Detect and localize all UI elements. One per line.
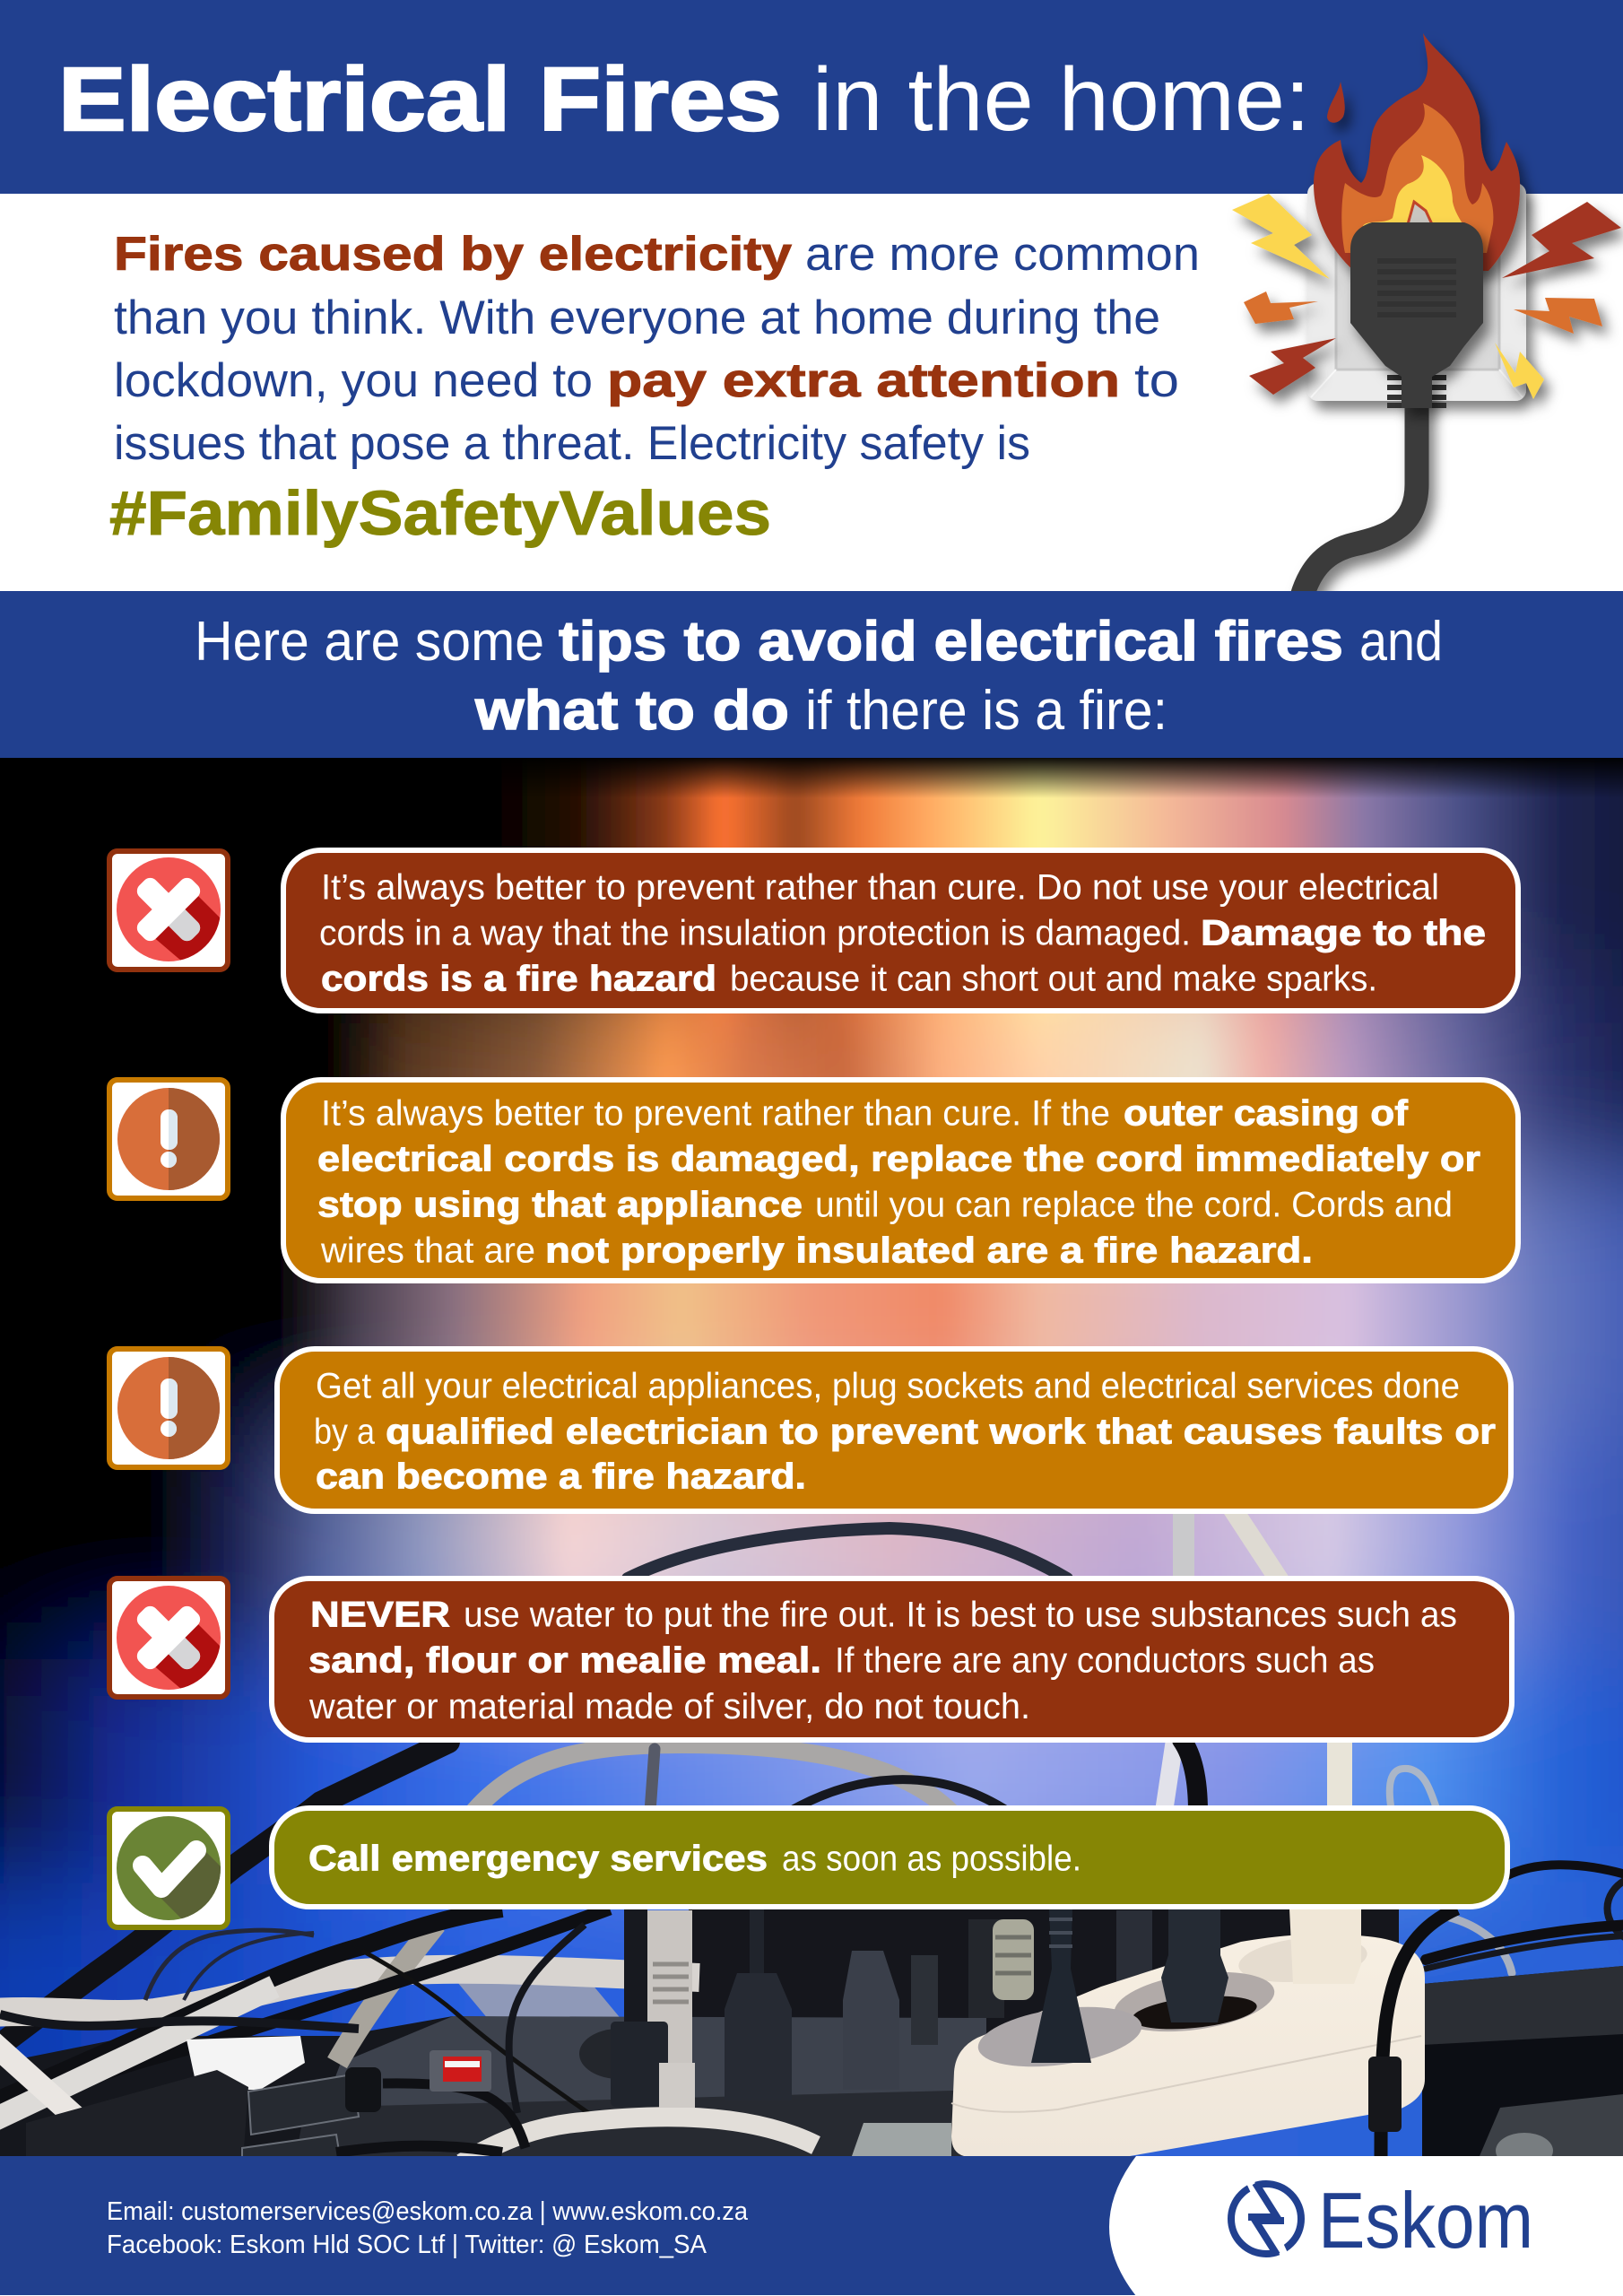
tip 3 card: [277, 1349, 1511, 1511]
plug grille: [1377, 258, 1456, 317]
tips heading band: [0, 591, 1623, 758]
footer contact details: Email: customerservices@eskom.co.za | www.eskom.co.za: [107, 2197, 749, 2226]
background photo: tangled cables: [0, 758, 1623, 2156]
intro paragraph: [114, 228, 1200, 470]
tip 4 card: sand, flour or mealie meal.: [308, 1641, 821, 1681]
tip 4 card: use water to put the fire out. It is best to use substances such as: [464, 1595, 1457, 1634]
tip 2 card: [283, 1080, 1518, 1281]
power strip dark body: [335, 2016, 986, 2106]
tip 5 card: Call emergency services: [308, 1839, 768, 1878]
intro paragraph: than you think. With everyone at home during the: [114, 291, 1160, 344]
black cord over strip: [1368, 1909, 1457, 2161]
tip 2 card: wires that are: [320, 1231, 535, 1270]
tip 2 card: stop using that appliance: [317, 1186, 803, 1225]
tip 5 card: as soon as possible.: [782, 1839, 1081, 1878]
rocker switch: [430, 2050, 491, 2092]
white bottom cable and black cord: [336, 2083, 816, 2163]
tip 4 card: If there are any conductors such as: [835, 1641, 1375, 1681]
footer contact details: Facebook: Eskom Hld SOC Ltf | Twitter: @ Eskom_SA: [107, 2231, 707, 2259]
tip 3 card: can become a fire hazard.: [316, 1457, 806, 1496]
footer contact details: [107, 2197, 749, 2259]
flames: [1314, 33, 1520, 271]
plug ribs: [1387, 375, 1446, 408]
logo mark: [1231, 2178, 1301, 2258]
dark base lower left: [0, 2016, 490, 2156]
socket holes on dark strip: [579, 2029, 611, 2079]
tip 2 card: It’s always better to prevent rather than cure. If the: [321, 1094, 1110, 1134]
light shapes behind the strip: [459, 1984, 619, 2017]
strip holes and plugs: [975, 1909, 1369, 2076]
title: in the home:: [812, 49, 1310, 150]
tip 2 card: outer casing of: [1124, 1094, 1409, 1134]
tip 1 card: [283, 850, 1518, 1011]
tip 3 card: by a: [314, 1412, 376, 1451]
tip 1 card: cords in a way that the insulation protection is damaged.: [319, 913, 1191, 952]
intro paragraph: Fires caused by electricity: [114, 228, 793, 281]
intro paragraph: pay extra attention: [607, 354, 1120, 407]
tip 3 card: qualified electrician to prevent work that causes faults or: [386, 1412, 1496, 1451]
black adapters lower left: [26, 2070, 248, 2161]
tip 3 card: Get all your electrical appliances, plug sockets and electrical services done: [316, 1367, 1460, 1406]
header band: [0, 0, 1623, 194]
tip 1 card: cords is a fire hazard: [321, 960, 716, 999]
tip 4 card: NEVER: [310, 1595, 450, 1634]
blurred fire and blue glow: [0, 758, 1623, 2156]
tips heading band: and: [1359, 611, 1443, 673]
right black box: [1422, 1966, 1623, 2156]
tips heading band: tips to avoid electrical fires: [559, 611, 1343, 673]
tip 5 card: [272, 1808, 1507, 1907]
icon: warning 1: [109, 1080, 228, 1198]
icon: warning 2: [109, 1349, 228, 1467]
icon: red cross 1: [109, 851, 231, 970]
icon: burning plug in socket: [1232, 33, 1621, 596]
footer band: [0, 2156, 1623, 2296]
cord plugs: [611, 1909, 1152, 2108]
logo wordmark: Eskom: [1318, 2176, 1533, 2265]
white power strip: [951, 1934, 1425, 2156]
tip 2 card: electrical cords is damaged, replace the cord immediately or: [317, 1139, 1480, 1178]
tip 1 card: because it can short out and make sparks.: [730, 960, 1377, 999]
tip 2 card: until you can replace the cord. Cords and: [815, 1186, 1453, 1225]
tip 4 card: water or material made of silver, do not touch.: [308, 1687, 1030, 1726]
socket plate: [1307, 183, 1526, 401]
tips heading band: if there is a fire:: [805, 680, 1167, 742]
dark fade at top of photo: [502, 758, 1623, 796]
lightning bolts: [1232, 194, 1621, 399]
cables upper: [0, 1507, 1623, 2052]
tips heading band: what to do: [474, 680, 789, 742]
icon: red cross 2: [109, 1578, 231, 1697]
plug body: [1350, 222, 1483, 408]
tip 1 card: It’s always better to prevent rather than cure. Do not use your electrical: [321, 868, 1439, 908]
title: [58, 49, 1310, 150]
tip 4 card: [272, 1578, 1512, 1740]
intro paragraph: to: [1134, 354, 1179, 407]
intro paragraph: are more common: [805, 228, 1200, 281]
tips heading band: Here are some: [195, 611, 544, 673]
icon: green check: [109, 1809, 236, 1931]
tip 2 card: not properly insulated are a fire hazard.: [545, 1231, 1313, 1270]
intro paragraph: lockdown, you need to: [114, 354, 593, 407]
white left cables: [0, 1909, 700, 2130]
title: Electrical Fires: [58, 49, 782, 150]
Eskom logo: [1231, 2176, 1533, 2265]
white patch lower left: [187, 2036, 305, 2090]
power cord: [1302, 404, 1417, 596]
hashtag: #FamilySafetyValues: [109, 478, 771, 548]
tip 1 card: Damage to the: [1201, 913, 1486, 952]
intro paragraph: issues that pose a threat. Electricity safety is: [114, 417, 1030, 470]
dark block behind plugs: [689, 1909, 1399, 2034]
